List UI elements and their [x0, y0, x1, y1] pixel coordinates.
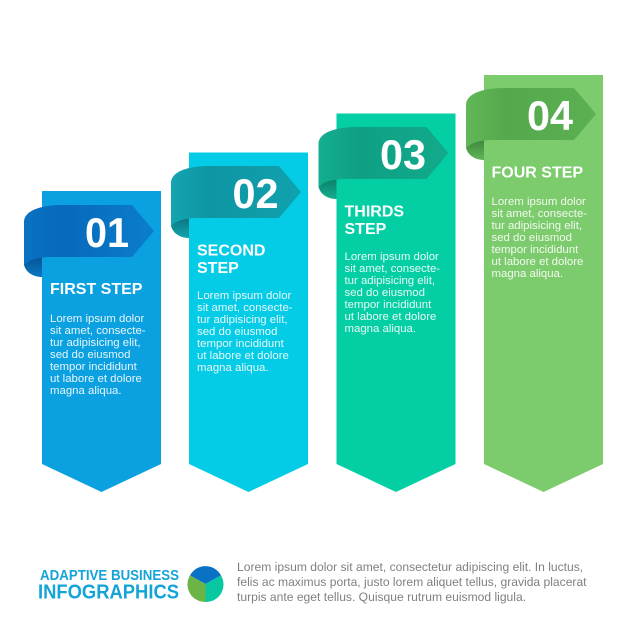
ribbon: step 2: [171, 166, 301, 238]
text: step 1 body: sed do eiusmod: [50, 349, 130, 361]
panel: step 3: [318, 114, 456, 492]
heading: four step: FOUR STEP: [492, 164, 583, 182]
panel: step 2: [171, 152, 308, 492]
ribbon: step 3: [318, 127, 448, 199]
title: adaptive business infographics: INFOGRAPHICS: [38, 582, 179, 604]
text: step 3 body: tur adipisicing elit,: [344, 275, 435, 287]
text: step 2 body: sit amet, consecte-: [197, 302, 293, 314]
panel: step 1: [24, 191, 161, 492]
text: step 1 body: ut labore et dolore: [50, 373, 142, 385]
text: step 2 body: magna aliqua.: [197, 362, 269, 374]
heading: first step: FIRST STEP: [50, 281, 143, 298]
text: step 4 body: sit amet, consecte-: [492, 208, 587, 220]
text: step 1 body: Lorem ipsum dolor: [50, 313, 145, 325]
text: step 3 body: ut labore et dolore: [344, 311, 436, 323]
title: adaptive business infographics: ADAPTIVE BUSINESS: [40, 568, 179, 584]
heading: thirds step: THIRDS: [344, 204, 404, 220]
text: step 2 body: Lorem ipsum dolor: [197, 290, 292, 302]
icon: pie chart: [188, 566, 223, 602]
title: adaptive business infographics: [38, 568, 179, 604]
text: step 4 body: tempor incididunt: [492, 244, 579, 256]
number: 01: 01: [85, 209, 129, 256]
number: 03: 03: [380, 131, 426, 178]
panel: step 4: [466, 75, 603, 492]
text: step 4 body: magna aliqua.: [492, 268, 563, 280]
text: footer description: felis ac maximus porta, justo lorem aliquet tellus, gravida placerat: [237, 575, 587, 589]
heading: thirds step: STEP: [344, 221, 387, 238]
text: step 1 body: magna aliqua.: [50, 385, 122, 397]
text: step 3 body: magna aliqua.: [344, 323, 416, 335]
number: 02: 02: [232, 170, 278, 217]
text: step 3 body: Lorem ipsum dolor: [344, 251, 439, 263]
text: step 3 body: sed do eiusmod: [344, 287, 425, 299]
ribbon: step 1: [24, 205, 154, 277]
text: step 1 body: sit amet, consecte-: [50, 325, 146, 337]
text: step 4 body: sed do eiusmod: [492, 232, 572, 244]
text: step 4 body: tur adipisicing elit,: [492, 220, 582, 232]
text: step 3 body: sit amet, consecte-: [344, 263, 440, 275]
text: step 4 body: ut labore et dolore: [492, 256, 583, 268]
ribbon: step 4: [466, 88, 596, 160]
heading: second step: STEP: [197, 260, 239, 277]
text: step 2 body: ut labore et dolore: [197, 350, 289, 362]
text: step 2 body: tempor incididunt: [197, 338, 285, 350]
text: step 4 body: Lorem ipsum dolor: [492, 196, 586, 208]
text: step 2 body: tur adipisicing elit,: [197, 314, 288, 326]
number: 04: 04: [527, 92, 574, 139]
heading: second step: SECOND: [197, 242, 265, 260]
text: step 2 body: sed do eiusmod: [197, 326, 277, 338]
text: step 1 body: tur adipisicing elit,: [50, 337, 141, 349]
text: step 1 body: tempor incididunt: [50, 361, 138, 373]
text: footer description: turpis ante eget tellus. Quisque rutrum euismod ligula.: [237, 590, 526, 604]
text: footer description: Lorem ipsum dolor sit amet, consectetur adipiscing elit. In luctus,: [237, 560, 583, 574]
text: step 3 body: tempor incididunt: [344, 299, 432, 311]
